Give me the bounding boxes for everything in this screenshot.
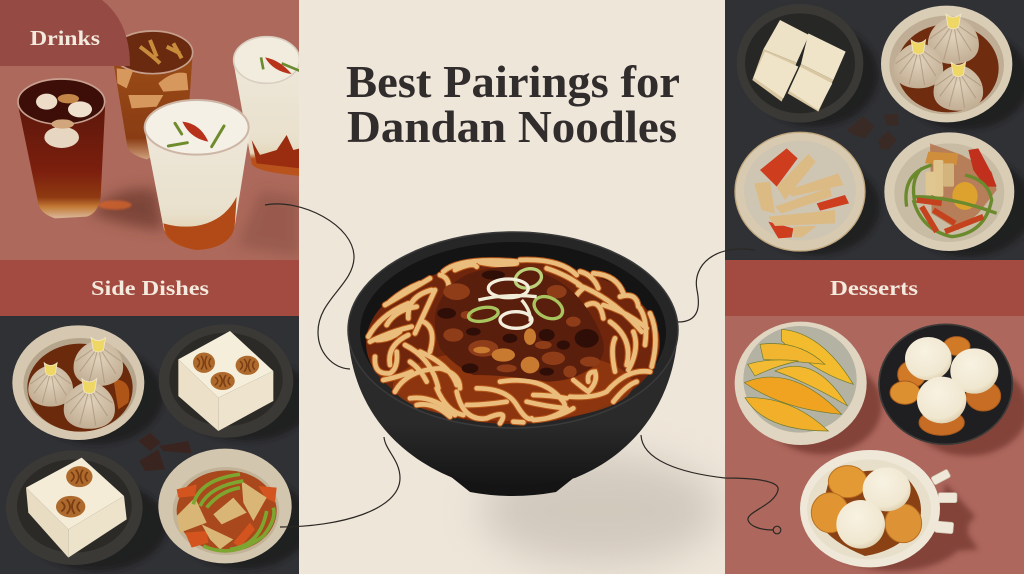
bowl foot bbox=[450, 476, 576, 496]
bowl: dumplings bbox=[12, 325, 144, 440]
glow under glass bbox=[98, 200, 132, 210]
banner: desserts bbox=[725, 260, 1024, 316]
plate: mango bbox=[735, 322, 867, 445]
bowl body bbox=[348, 330, 678, 485]
plate shadows bbox=[784, 34, 1024, 258]
drink shadows bbox=[90, 189, 300, 257]
bowl: stir fry bbox=[158, 449, 292, 563]
center panel background bbox=[299, 0, 725, 574]
label: drinks: Drinks bbox=[30, 26, 100, 50]
title: Dandan Noodles bbox=[347, 101, 677, 152]
tab: drinks bbox=[0, 0, 130, 66]
scallions bbox=[467, 266, 566, 328]
plate shadows bbox=[56, 357, 299, 572]
bowl: soup dumplings bbox=[881, 6, 1012, 122]
drink: iced tea back bbox=[112, 31, 193, 159]
bowl: green beans mix bbox=[884, 132, 1014, 251]
meat sauce bbox=[435, 267, 604, 382]
title bbox=[346, 56, 680, 152]
panel: drinks bbox=[0, 0, 300, 260]
connector end dot bbox=[773, 526, 781, 534]
panel: side dishes lower bbox=[0, 316, 313, 574]
bowl cast shadow bbox=[480, 455, 720, 565]
drink: iced tea front bbox=[17, 79, 105, 218]
banner: side dishes bbox=[0, 260, 299, 316]
plate: scallion pancake bbox=[735, 132, 865, 251]
connector lines bbox=[265, 204, 778, 530]
title: Best Pairings for bbox=[346, 56, 680, 107]
pepper bits bbox=[847, 113, 898, 150]
plate: tofu with walnuts bbox=[159, 324, 293, 438]
panel: side dishes upper right bbox=[725, 0, 1024, 260]
panel: desserts bbox=[725, 316, 1024, 574]
label: desserts: Desserts bbox=[830, 276, 918, 300]
drink: milk back bbox=[233, 37, 300, 176]
bowl rim bbox=[348, 232, 678, 428]
noodles bbox=[368, 260, 655, 423]
plate: tofu bbox=[6, 450, 143, 565]
pepper bits bbox=[138, 433, 192, 471]
sauce bbox=[366, 262, 660, 424]
plate: tofu squares bbox=[737, 4, 863, 123]
label: side dishes: Side Dishes bbox=[91, 276, 209, 300]
drink: milk front bbox=[145, 100, 250, 250]
plate shadows bbox=[777, 370, 1024, 574]
main bowl of dandan noodles bbox=[348, 232, 678, 496]
plate: rice balls bbox=[879, 324, 1012, 444]
plate: rice balls with handles bbox=[800, 450, 957, 567]
